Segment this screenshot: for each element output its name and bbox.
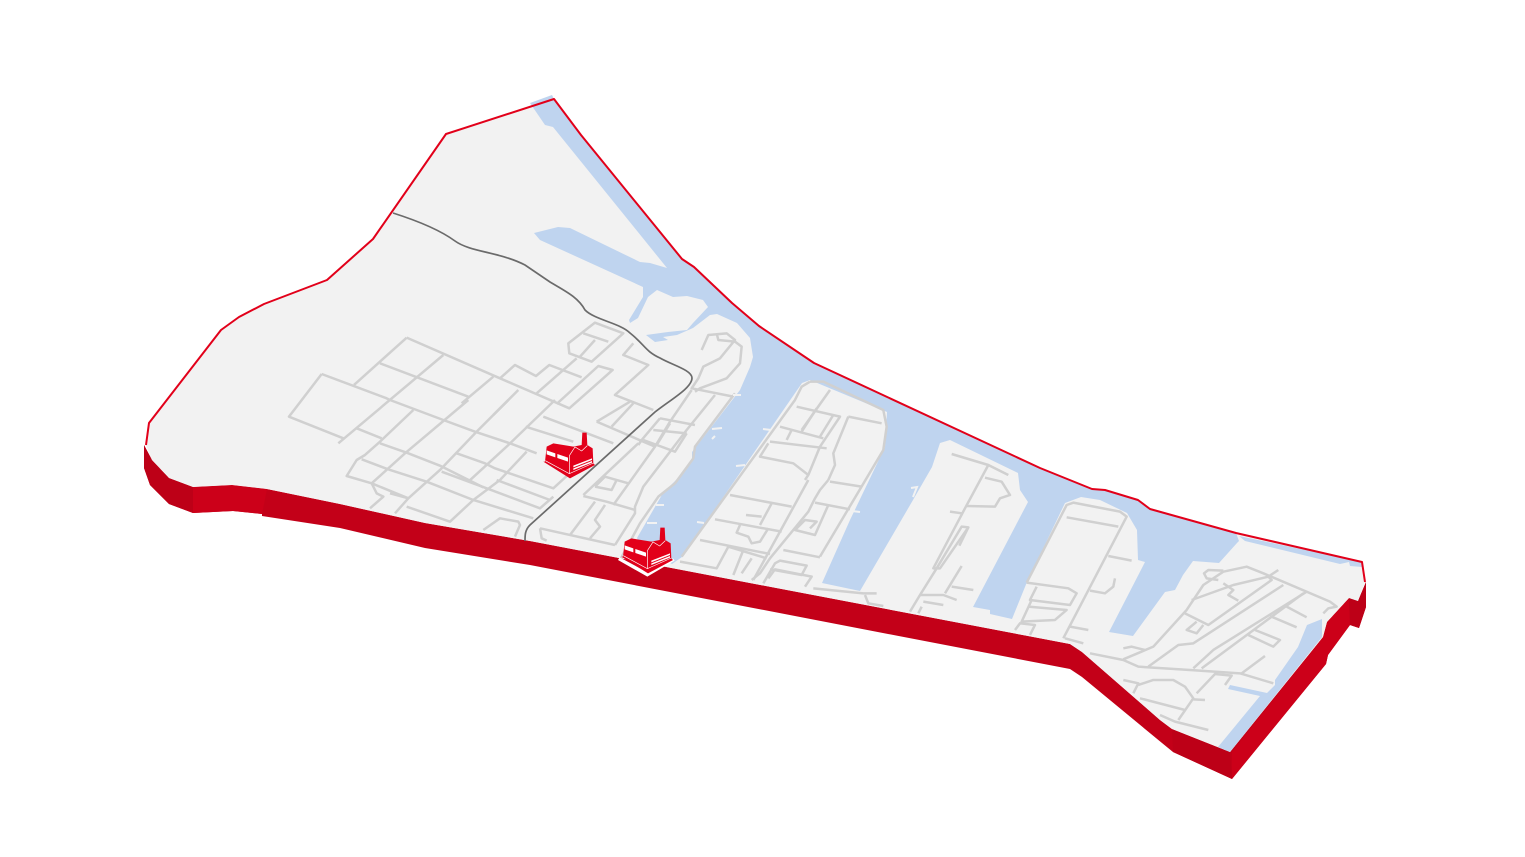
waterfront peninsula and island streets [682,333,887,557]
red boundary line [146,99,1365,582]
northwestern street grid [289,323,655,447]
eastern island streets [910,454,1132,643]
lower island streets [680,480,883,606]
icon: factory south [618,528,675,577]
southeast streets [1090,567,1337,730]
land surface [146,99,1365,752]
icon: factory north [543,433,595,478]
piers [647,395,917,523]
river and harbour water [530,95,1239,636]
southeast water channel [1218,619,1322,752]
southwestern street grid [347,400,573,537]
main road [393,213,692,541]
red base extrusion [144,445,1366,779]
northeast water strip [1239,536,1362,567]
central streets [540,390,735,560]
